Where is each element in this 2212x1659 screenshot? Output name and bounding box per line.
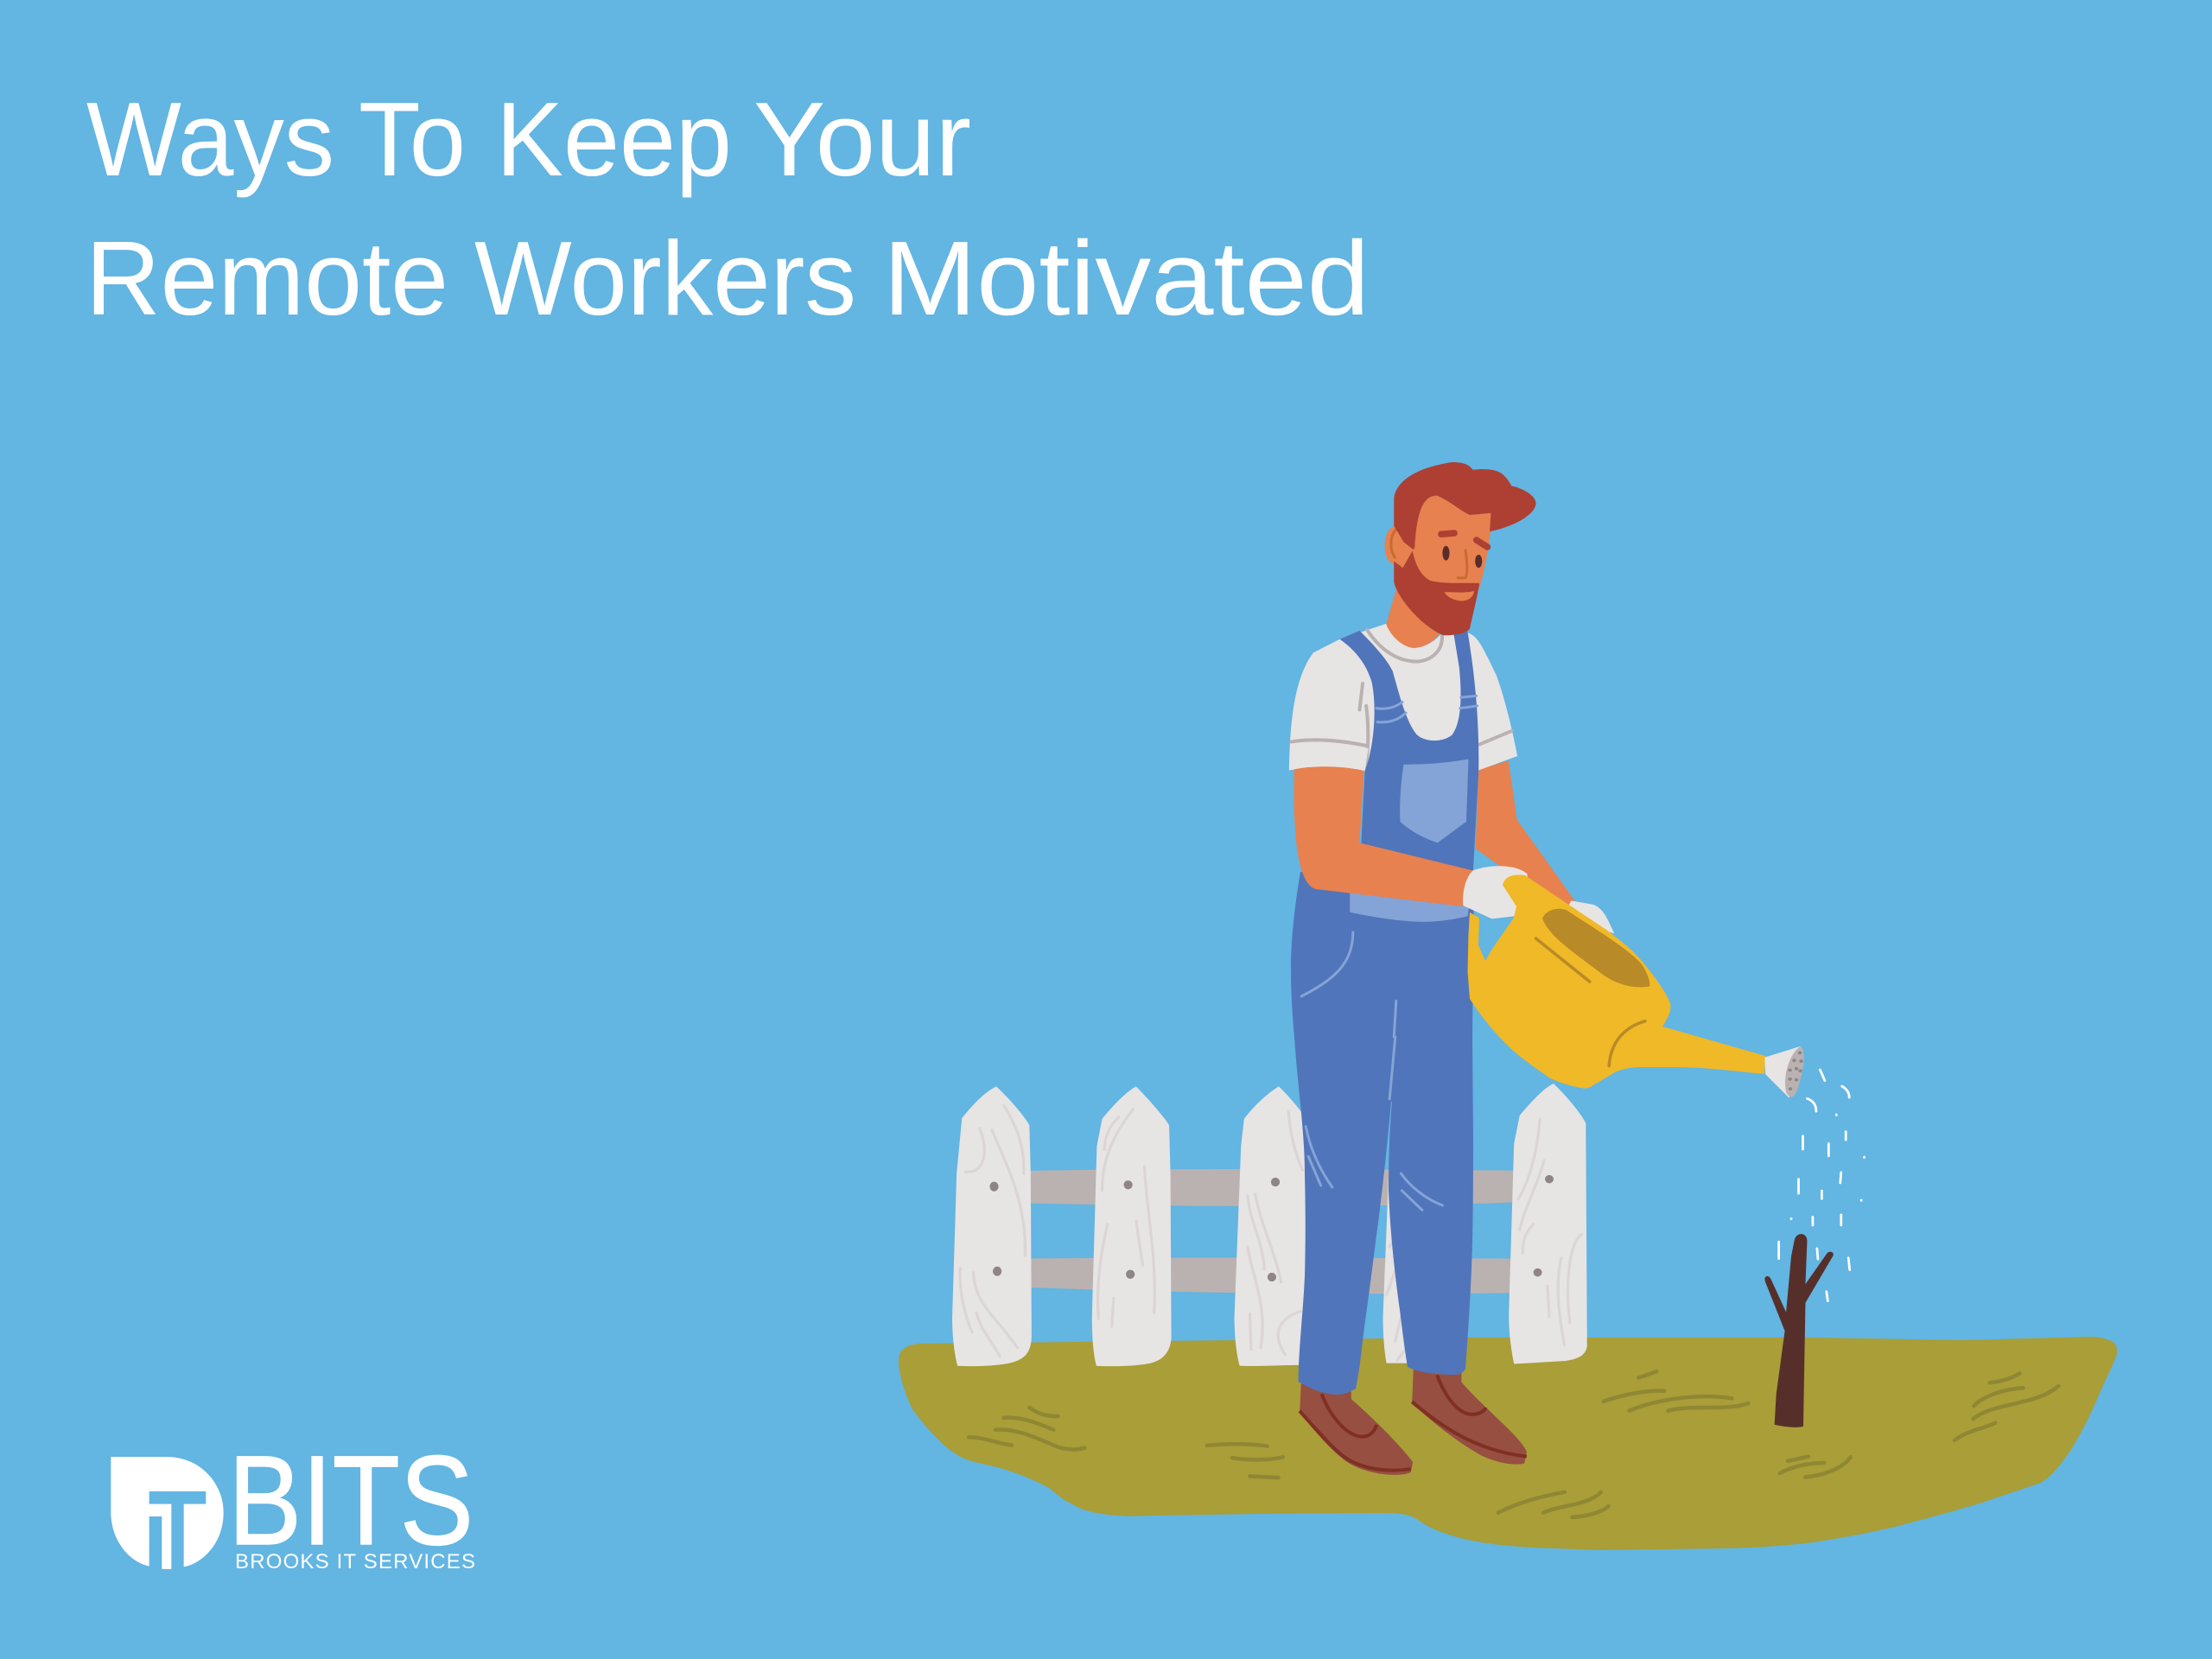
title: Ways xyxy=(86,80,334,198)
water drops xyxy=(1779,1070,1865,1301)
grass tufts right xyxy=(1498,1371,2058,1517)
icon: iT shield xyxy=(111,1457,224,1569)
overalls bib xyxy=(1340,631,1478,875)
bib pocket xyxy=(1400,760,1468,842)
can spout and rose xyxy=(1609,1021,1804,1098)
ear xyxy=(1385,525,1417,568)
grass tufts left xyxy=(969,1408,1283,1478)
leg creases xyxy=(1306,1037,1442,1210)
title: Workers xyxy=(474,219,856,337)
fence rails xyxy=(996,1169,1552,1294)
can top patch xyxy=(1536,909,1649,987)
sapling xyxy=(1764,1234,1834,1427)
near arm xyxy=(1294,766,1473,906)
far arm xyxy=(1476,760,1614,933)
overalls legs xyxy=(1291,872,1474,1395)
title: Your xyxy=(753,80,971,198)
logo tagline: BROOKS IT SERVICES xyxy=(235,1550,475,1573)
torso and head xyxy=(1289,462,1536,1037)
beard xyxy=(1394,550,1479,635)
hair xyxy=(1394,462,1536,550)
near glove xyxy=(1463,866,1531,918)
mouth xyxy=(1444,591,1474,601)
logo: BITS xyxy=(111,1430,475,1573)
ground xyxy=(899,1337,2117,1550)
fence xyxy=(952,1084,1587,1366)
title xyxy=(86,80,1370,337)
shoes xyxy=(1300,1362,1527,1475)
fence post 3 xyxy=(1235,1086,1312,1366)
logo wordmark: BITS xyxy=(228,1430,474,1572)
title: To xyxy=(359,80,466,198)
brows, eyes and nose xyxy=(1441,533,1487,578)
face xyxy=(1399,496,1491,590)
fence post 5 xyxy=(1509,1084,1587,1363)
title: Motivated xyxy=(883,219,1370,337)
t-shirt xyxy=(1289,624,1517,772)
fence post 4 xyxy=(1383,1114,1408,1363)
neck xyxy=(1386,563,1470,648)
waistband xyxy=(1350,891,1470,922)
watering can xyxy=(1467,874,1804,1098)
fence post 1 xyxy=(952,1086,1032,1366)
gardener xyxy=(1289,462,1804,1475)
title: Remote xyxy=(86,219,448,337)
fence post 2 xyxy=(1092,1086,1172,1366)
title: Keep xyxy=(496,80,732,198)
